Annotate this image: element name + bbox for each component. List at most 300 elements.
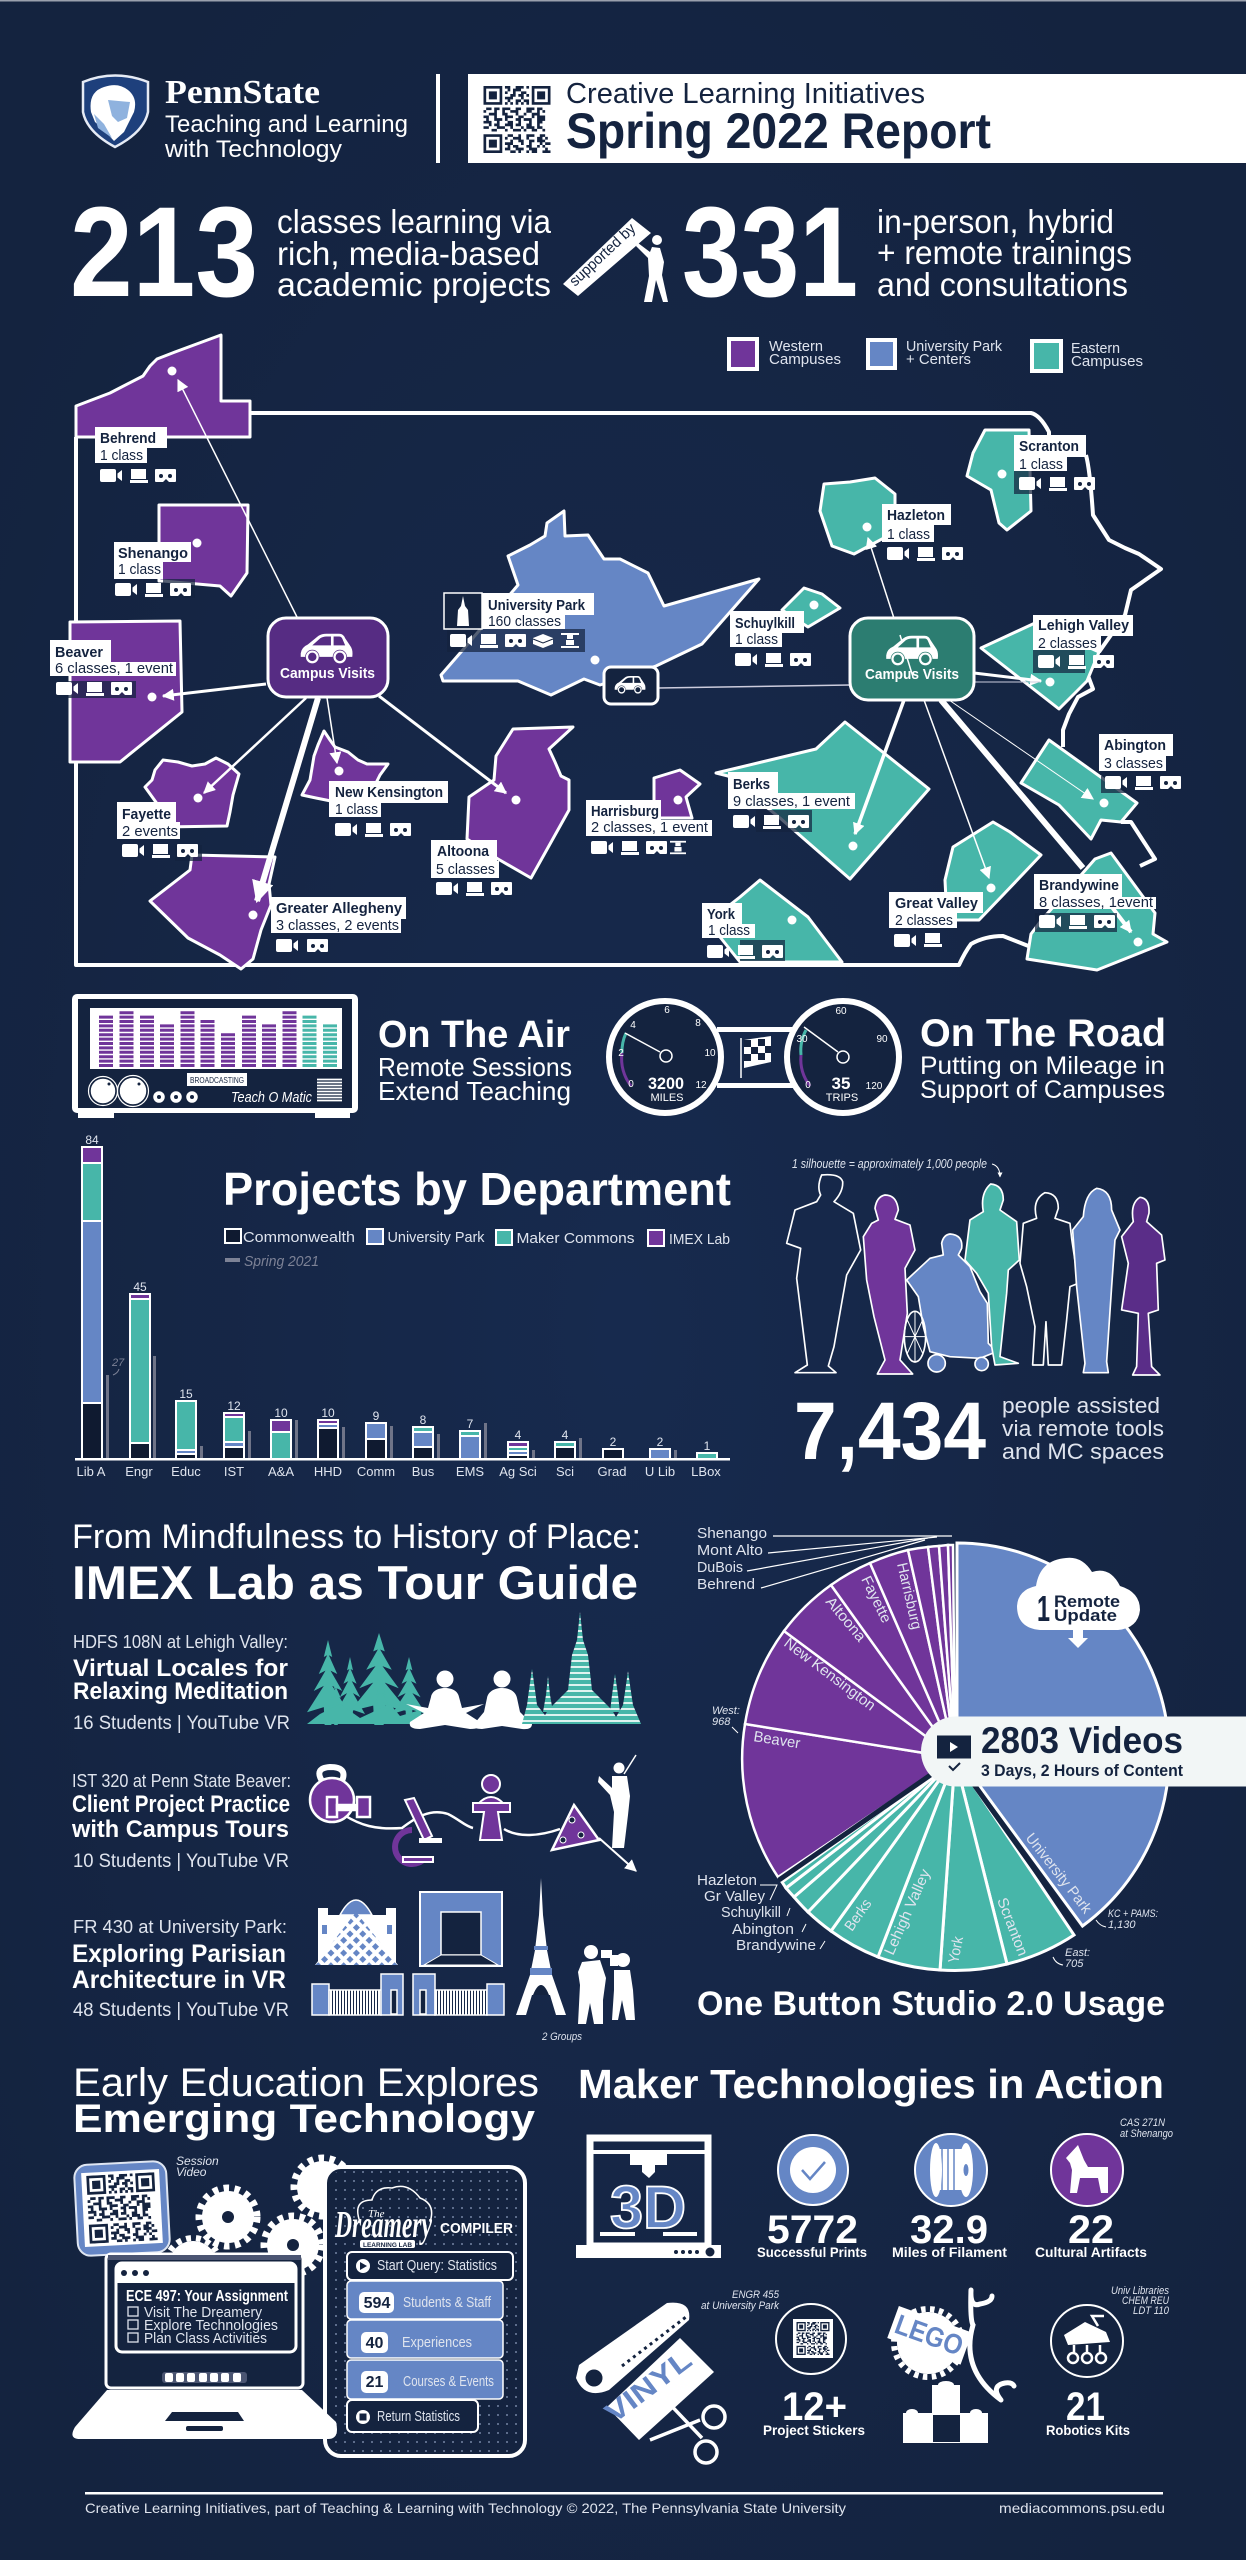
label: Altoona [431, 840, 512, 896]
window: assignment: ECE 497: Your Assignment [126, 2288, 289, 2305]
bar: EMS [460, 1431, 480, 1459]
title banner: Spring 2022 Report [566, 103, 991, 159]
stat: 12+ project stickers: at University Park [701, 2300, 779, 2312]
notes: group totals: 968 [712, 1716, 731, 1728]
icon: check [790, 2147, 836, 2193]
stat: 213 classes [70, 181, 552, 324]
label: Greater Allegheny: Greater Allegheny [276, 900, 403, 917]
bar: Engr [130, 1294, 150, 1459]
block: start query: Start Query: Statistics [377, 2257, 497, 2274]
block: 40 experiences: 40 [366, 2335, 384, 2352]
note: session video: Video [176, 2165, 207, 2179]
text block: IST 320: 10 Students | YouTube VR [73, 1851, 289, 1872]
label: Shenango: 1 class [118, 561, 161, 578]
gauge: trips: 120 [866, 1081, 883, 1092]
spring 2021 comparison bars [106, 1356, 677, 1459]
bar values: 7 [467, 1417, 474, 1431]
silhouette: outline person 2 [1020, 1193, 1078, 1365]
gauge: miles [609, 1001, 721, 1113]
meditators [406, 1670, 532, 1729]
illustration: radio equalizer: BROADCASTING [190, 1075, 244, 1085]
label: Schuylkill [730, 611, 811, 667]
silhouette: blue person [1073, 1188, 1120, 1373]
label: Fayette [117, 802, 198, 858]
stat: 7,434 people: people assisted [1002, 1393, 1160, 1418]
icon: Louvre [315, 1900, 398, 1965]
icon: podium speaker [473, 1775, 510, 1840]
icon: filament spool [930, 2143, 973, 2197]
icon: Parisian gates [312, 1974, 504, 2015]
callout: remote update cloud [1017, 1558, 1140, 1648]
bar categories: Sci [556, 1464, 574, 1479]
stat: 22 cultural artifacts [1035, 2117, 1173, 2260]
header divider [436, 74, 440, 163]
label: Abington [1099, 734, 1181, 790]
bar values [85, 1133, 711, 1453]
heading: On The Road [920, 1012, 1166, 1104]
bar values: 8 [420, 1413, 427, 1427]
silhouettes: photographers [578, 1945, 635, 2024]
stat: 22 cultural artifacts: Cultural Artifacts [1035, 2244, 1147, 2260]
label: Harrisburg: Harrisburg [591, 803, 659, 820]
county: Schuylkill [782, 588, 840, 627]
bar: HHD [318, 1420, 338, 1459]
label: Shenango [114, 542, 191, 597]
stacked bar chart: projects by department [75, 1133, 730, 1479]
logo: The Dreamery: COMPILER [440, 2220, 513, 2237]
label: Scranton: Scranton [1019, 438, 1079, 455]
callout: remote update cloud: 1 [1037, 1588, 1050, 1629]
illustration: dashboard gauges [609, 1001, 899, 1113]
label: Harrisburg: 2 classes, 1 event [591, 819, 709, 836]
label: Behrend: Behrend [100, 430, 156, 447]
pie chart: One Button Studio usage [697, 1525, 1246, 1971]
notes: group totals: KC + PAMS: [1108, 1908, 1158, 1920]
bar: Lib A [82, 1147, 102, 1459]
label: Brandywine [1034, 874, 1156, 929]
label: York: York [707, 906, 736, 923]
notes: group totals [712, 1705, 1158, 1970]
block: 21 courses and events: Courses & Events [403, 2373, 494, 2390]
stat: 331 trainings: in-person, hybrid [877, 203, 1114, 240]
bar values: 9 [373, 1409, 380, 1423]
stat: 21 robotics kits: CHEM REU [1122, 2295, 1169, 2307]
county: Behrend [76, 335, 250, 437]
axis [75, 1458, 730, 1460]
bar chart legend: Spring 2021 [244, 1253, 319, 1270]
bar categories: U Lib [645, 1464, 675, 1479]
text block: HDFS 108N: HDFS 108N at Lehigh Valley: [73, 1632, 288, 1652]
map legend: Campuses [769, 351, 841, 368]
heading: On The Air: On The Air [378, 1014, 570, 1056]
wedge labels: Scranton [993, 1895, 1031, 1958]
wedge labels: University Park [1022, 1830, 1095, 1917]
map legend: University Park [906, 338, 1002, 355]
block: 40 experiences: Experiences [402, 2334, 472, 2351]
stat: 5772 successful prints [757, 2135, 867, 2260]
small east labels [697, 1872, 825, 1954]
window: assignment [116, 2263, 296, 2352]
arrows: western campus visits [163, 380, 506, 901]
heading: On The Air: Remote Sessions [378, 1052, 572, 1082]
logo: The Dreamery [334, 2186, 513, 2249]
bar: Sci [555, 1442, 575, 1459]
text block: IST 320 [71, 1771, 291, 1872]
stat: 21 robotics kits: Univ Libraries [1111, 2285, 1169, 2297]
panel: eastern campus visits [850, 618, 974, 700]
bar: A&A [271, 1420, 291, 1459]
bar values: 45 [133, 1280, 147, 1294]
illustration: campus tour path [310, 1755, 636, 1871]
icon: 3D printer: 3D [610, 2174, 686, 2241]
bar: U Lib [650, 1449, 670, 1459]
footer: mediacommons.psu.edu [999, 2500, 1165, 2516]
bar: IST [224, 1413, 244, 1459]
county: New Kensington [302, 731, 388, 801]
silhouette: tour guide with flag [598, 1755, 636, 1848]
bar categories: Engr [125, 1464, 153, 1479]
notes: group totals: West: [712, 1705, 740, 1717]
icon: person holding supported-by sign [563, 218, 668, 302]
note: session video: Session [176, 2154, 219, 2168]
stat: 21 robotics kits [1046, 2285, 1170, 2438]
icon: robot [1064, 2316, 1110, 2363]
block: 594 students and staff: 594 [364, 2295, 390, 2312]
gauge: trips: TRIPS [826, 1092, 858, 1104]
bar chart legend: University Park [388, 1229, 485, 1246]
block: 594 students and staff: Students & Staff [403, 2294, 492, 2311]
stat: 5772 successful prints: Successful Prints [757, 2244, 867, 2260]
wedge labels: Fayette [857, 1573, 895, 1626]
state outline [76, 413, 1161, 965]
stat: 22 cultural artifacts: at Shenango [1120, 2128, 1173, 2140]
callout: remote update cloud: Update [1054, 1606, 1117, 1625]
label: Lehigh Valley: Lehigh Valley [1038, 617, 1130, 634]
label: Brandywine: 8 classes, 1event [1039, 894, 1154, 911]
label: Behrend: 1 class [100, 447, 143, 464]
icon: microscope [395, 1798, 441, 1864]
bar chart legend: IMEX Lab [669, 1231, 730, 1248]
label: Hazleton: 1 class [887, 526, 930, 543]
stat: 213 classes: classes learning via [277, 203, 552, 240]
map legend: + Centers [906, 351, 971, 368]
heading: Early Education Explores Emerging Technology: Early Education Explores [73, 2061, 539, 2105]
stat: 331 trainings: and consultations [877, 266, 1128, 303]
bar values: 2 [657, 1435, 664, 1449]
label: Scranton: 1 class [1019, 456, 1063, 473]
bar categories: HHD [314, 1464, 342, 1479]
title banner [468, 74, 1246, 163]
county: University Park [441, 511, 759, 695]
silhouette: purple person [863, 1195, 915, 1374]
gauge: miles: 12 [695, 1080, 707, 1091]
stat: 213 classes: academic projects [277, 266, 551, 303]
bar categories: A&A [268, 1464, 294, 1479]
label: Altoona: Altoona [437, 843, 490, 860]
bar: Grad [603, 1449, 623, 1459]
gauge: miles: 3200 [648, 1074, 684, 1093]
small west labels with leader lines: Behrend [697, 1576, 755, 1593]
small east labels: Schuylkill [721, 1904, 781, 1921]
county: Scranton [967, 430, 1031, 530]
label: Brandywine: Brandywine [1039, 877, 1119, 894]
heading: Maker Technologies in Action: Maker Technologies in Action [578, 2061, 1164, 2107]
title banner: Creative Learning Initiatives [566, 78, 925, 110]
gauge: trips [787, 1001, 899, 1113]
stat: 22 cultural artifacts: CAS 271N [1120, 2117, 1165, 2129]
label: Shenango: Shenango [118, 545, 188, 562]
icon: pizza slice [552, 1805, 599, 1850]
bar: Comm [366, 1423, 386, 1459]
notes: group totals: East: [1065, 1947, 1090, 1959]
stat: 21 robotics kits: Robotics Kits [1046, 2422, 1130, 2438]
gauge: miles: MILES [650, 1092, 684, 1104]
icon: LEGO gear, arm and bricks [887, 2290, 1014, 2443]
text block: FR 430: Architecture in VR [72, 1966, 286, 1994]
bar categories: Educ [171, 1464, 201, 1479]
heading: Early Education Explores Emerging Technology [73, 2061, 539, 2141]
footer: Creative Learning Initiatives, part of Teaching & Learning with Technology © 2022, The Pennsylvania State University [85, 2500, 846, 2516]
text block: HDFS 108N [73, 1632, 290, 1734]
heading: Projects by Department: Projects by Department [223, 1163, 731, 1215]
icon: Eiffel Tower [516, 1878, 566, 2015]
county: Altoona [467, 727, 573, 878]
stat: 331 trainings: + remote trainings [877, 234, 1132, 271]
label: Lehigh Valley: 2 classes [1038, 635, 1097, 652]
small east labels: Gr Valley [704, 1888, 765, 1905]
bar values: 4 [562, 1428, 569, 1442]
label: New Kensington: 1 class [335, 801, 378, 818]
county: Berks [716, 722, 929, 879]
label: University Park: University Park [488, 597, 586, 614]
label: Hazleton [882, 504, 963, 561]
county: Great Valley [945, 822, 1041, 920]
silhouette: dark purple person [1122, 1197, 1165, 1375]
callout: 2803 videos banner [921, 1716, 1246, 1786]
bar chart legend [225, 1229, 730, 1270]
label: New Kensington [329, 781, 448, 837]
arrows: eastern campus visits [658, 538, 1131, 932]
bar values: 4 [515, 1428, 522, 1442]
label: Fayette: 2 events [122, 823, 178, 840]
label: Berks [728, 772, 855, 829]
label: Abington: 3 classes [1104, 755, 1163, 772]
map legend: Western [769, 338, 823, 355]
callout: 2803 videos banner: 2803 Videos [981, 1720, 1183, 1761]
heading: One Button Studio 2.0 Usage: One Button Studio 2.0 Usage [697, 1985, 1165, 2023]
block: 40 experiences [347, 2320, 503, 2358]
label: University Park [444, 593, 594, 648]
panel: Dreamery compiler [325, 2167, 525, 2456]
small west labels with leader lines [697, 1525, 952, 1593]
county: Beaver [70, 621, 182, 762]
label: Fayette: Fayette [122, 806, 171, 823]
silhouette: teal person [965, 1184, 1019, 1365]
heading: On The Road: Support of Campuses [920, 1076, 1165, 1104]
block: return statistics: Return Statistics [377, 2408, 460, 2425]
text block: IST 320: Client Project Practice [72, 1791, 290, 1818]
callout: 2803 videos banner: 3 Days, 2 Hours of Content [981, 1761, 1183, 1780]
label: Great Valley: 2 classes [895, 912, 953, 929]
block: 21 courses and events: 21 [366, 2374, 384, 2391]
bar categories [77, 1464, 721, 1479]
text block: IST 320: with Campus Tours [71, 1816, 289, 1843]
gauge: trips: 35 [832, 1074, 850, 1093]
county: Shenango [159, 505, 248, 596]
bar categories: IST [224, 1464, 244, 1479]
laptop screen [106, 2254, 303, 2388]
bar categories: EMS [456, 1464, 484, 1479]
silhouette: outline person [787, 1175, 861, 1373]
bar values: 2 [610, 1435, 617, 1449]
icon: University Park car badge [604, 667, 658, 704]
block: return statistics [347, 2400, 478, 2432]
bar categories: Ag Sci [499, 1464, 537, 1479]
stat: 213 classes: 213 [70, 181, 258, 324]
heading: On The Road: On The Road [920, 1012, 1166, 1055]
small east labels: Brandywine [736, 1937, 816, 1954]
bar: Bus [413, 1427, 433, 1459]
wedge labels: Harrisburg [893, 1561, 925, 1631]
label: Lehigh Valley [1033, 615, 1133, 669]
county: Fayette [145, 758, 239, 827]
logo: The Dreamery: LEARNING LAB [363, 2242, 412, 2249]
bar values: 10 [274, 1406, 288, 1420]
note: session video [176, 2154, 219, 2179]
label: Scranton [1014, 435, 1095, 491]
wedge: University Park [957, 1543, 1169, 1926]
illustration: laptop, gears and QR [74, 2154, 352, 2388]
activity icon backdrops [56, 471, 1127, 961]
label: Great Valley: Great Valley [895, 895, 979, 912]
QR code [484, 86, 550, 153]
wedge labels: New Kensington [781, 1635, 879, 1714]
bar values: 10 [321, 1406, 335, 1420]
arrow: tour direction [599, 1838, 636, 1871]
county: Harrisburg [654, 770, 700, 818]
gauge: trips: 30 [796, 1034, 808, 1045]
gauge: miles: 4 [630, 1020, 636, 1031]
icon: dala horse [1066, 2145, 1108, 2193]
gauge: miles: 10 [704, 1048, 716, 1059]
icon: vinyl roll and scissors [576, 2303, 725, 2463]
logo: Penn State Teaching and Learning with Technology: PennState [165, 74, 320, 111]
wedge labels: Lehigh Valley [881, 1866, 934, 1958]
logo: The Dreamery: The [368, 2208, 385, 2220]
icon: lion shield [83, 76, 148, 147]
label: York: 1 class [708, 922, 750, 939]
trees [307, 1633, 426, 1725]
heading: On The Air: Extend Teaching [378, 1076, 571, 1106]
text block: HDFS 108N: 16 Students | YouTube VR [73, 1713, 290, 1734]
county: Lehigh Valley [981, 623, 1099, 709]
text block: IST 320: IST 320 at Penn State Beaver: [72, 1771, 291, 1791]
heading: IMEX Lab as Tour Guide [72, 1518, 641, 1609]
icon: person holding supported-by sign: supported by [566, 220, 640, 290]
small east labels: Hazleton [697, 1872, 757, 1889]
stat: 32.9 miles of filament: 32.9 [910, 2208, 988, 2252]
bar: Educ [176, 1401, 196, 1459]
map legend [729, 338, 1143, 371]
logo: Penn State Teaching and Learning with Technology: Teaching and Learning [165, 111, 408, 138]
gauge: miles: 2 [618, 1048, 624, 1059]
label: Beaver [50, 640, 176, 696]
bar categories: Comm [357, 1464, 395, 1479]
small west labels with leader lines: DuBois [697, 1559, 743, 1576]
gauge: miles: 8 [695, 1018, 701, 1029]
label: Great Valley [889, 892, 983, 947]
notes: group totals: 705 [1065, 1958, 1084, 1970]
gauge: trips: 0 [805, 1080, 811, 1091]
icon: checkered flag [741, 1036, 771, 1078]
bar chart legend: Commonwealth [243, 1229, 355, 1246]
campus dots [148, 366, 1142, 946]
heading: On The Air [378, 1014, 572, 1106]
stat: 12+ project stickers: ENGR 455 [732, 2289, 780, 2301]
text block: FR 430: 48 Students | YouTube VR [73, 2000, 289, 2021]
text block: HDFS 108N: Relaxing Meditation [73, 1678, 288, 1705]
panel: western campus visits [268, 618, 388, 697]
heading: IMEX Lab as Tour Guide: From Mindfulness to History of Place: [72, 1518, 641, 1556]
QR card: session video [74, 2161, 170, 2256]
gauge: trips: 60 [835, 1006, 847, 1017]
wedge labels: York [945, 1935, 967, 1965]
label: Schuylkill: 1 class [735, 631, 778, 648]
stat: 22 cultural artifacts: 22 [1068, 2208, 1114, 2252]
map of Pennsylvania campuses [50, 335, 1181, 970]
label: Beaver: Beaver [55, 644, 103, 661]
stat: 32.9 miles of filament [892, 2134, 1007, 2260]
caption: silhouette scale [792, 1156, 1000, 1177]
window: assignment: Visit The Dreamery [144, 2304, 262, 2321]
note: 2 groups: 2 Groups [541, 2031, 582, 2043]
stat: 21 robotics kits: 21 [1066, 2385, 1105, 2429]
footer [85, 2492, 1165, 2516]
wedges: Eastern campuses [782, 1758, 1074, 1971]
small east labels: Abington [732, 1921, 794, 1938]
county: Abington [1021, 740, 1137, 839]
text block: FR 430 [72, 1917, 289, 2021]
label: York [702, 903, 783, 959]
bar values: 1 [704, 1439, 711, 1453]
wedge labels [752, 1561, 1095, 1965]
wedge labels: Berks [841, 1896, 875, 1934]
wedge labels: Altoona [822, 1594, 869, 1646]
stat: 7,434 people: and MC spaces [1002, 1439, 1164, 1464]
illustration: forest, meditators and temple [307, 1612, 641, 1729]
logo: The Dreamery: Dreamery [334, 2204, 432, 2246]
people silhouettes [787, 1156, 1165, 1375]
bar categories: Grad [598, 1464, 626, 1479]
county: Hazleton [820, 478, 895, 554]
bar values: 84 [85, 1133, 99, 1147]
callout: remote update cloud: Remote [1054, 1592, 1120, 1611]
heading: IMEX Lab as Tour Guide: IMEX Lab as Tour Guide [72, 1556, 638, 1609]
label: Harrisburg [586, 800, 712, 855]
text block: FR 430: Exploring Parisian [72, 1940, 286, 1968]
stat: 7,434 people: 7,434 [794, 1386, 986, 1477]
logo: Penn State Teaching and Learning with Technology [83, 74, 408, 163]
label: Beaver: 6 classes, 1 event [55, 660, 174, 677]
bar categories: Lib A [77, 1464, 106, 1479]
small west labels with leader lines: Mont Alto [697, 1542, 763, 1559]
block: 21 courses and events [347, 2360, 503, 2399]
gauge: miles: 0 [628, 1079, 634, 1090]
region gaps [779, 1758, 1078, 1930]
bar chart legend: Maker Commons [516, 1230, 634, 1247]
stat: 331 trainings: 331 [682, 181, 858, 324]
label: Altoona: 5 classes [436, 861, 495, 878]
